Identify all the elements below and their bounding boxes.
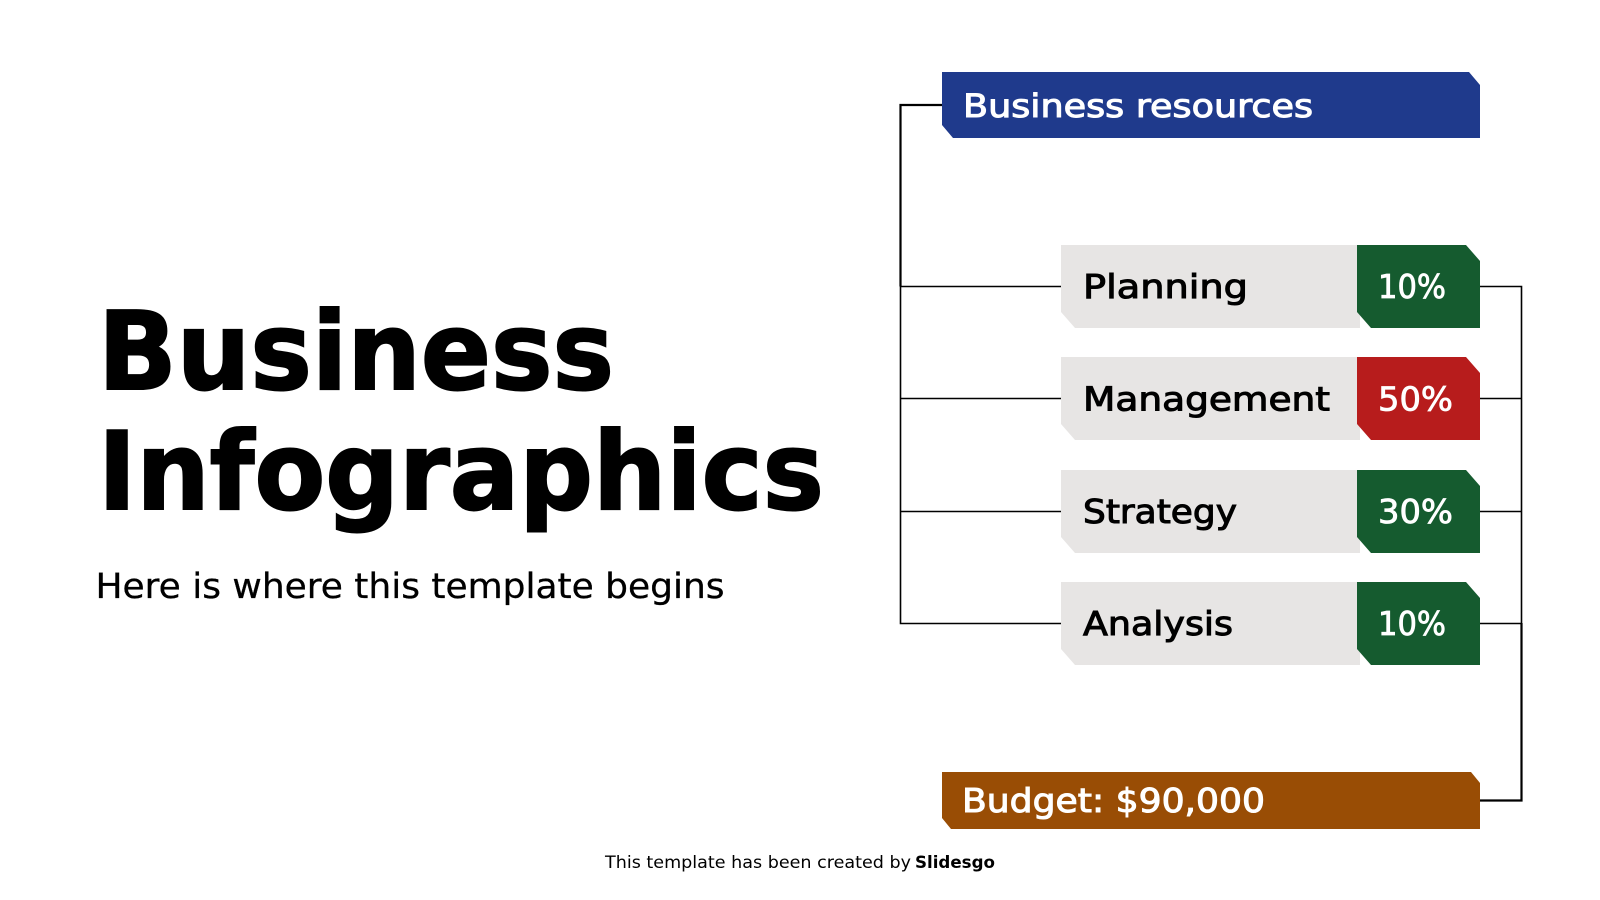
row: planning 10%: Planning [1083, 267, 1248, 306]
row: strategy 30% [1061, 470, 1480, 553]
footer bar: budget [942, 772, 1480, 829]
row: strategy 30%: 30% [1378, 492, 1453, 531]
header bar: business resources: Business resources [963, 87, 1313, 125]
row: analysis 10%: Analysis [1083, 604, 1233, 643]
title: Infographics [98, 410, 824, 535]
credit line: This template has been created by [604, 853, 911, 873]
footer bar: budget: Budget: $90,000 [962, 781, 1265, 820]
row: planning 10% [1061, 245, 1480, 328]
row: management 50%: 50% [1378, 380, 1453, 418]
row: management 50% [1061, 357, 1480, 440]
header bar: business resources [942, 72, 1480, 138]
subtitle: Here is where this template begins [96, 567, 725, 607]
left connector bracket [900, 105, 1061, 624]
title [98, 290, 824, 535]
row: management 50%: Management [1083, 380, 1330, 418]
right connector bracket [1480, 286, 1522, 800]
credit line: Slidesgo [915, 853, 995, 873]
row: analysis 10% [1061, 582, 1480, 665]
row: analysis 10%: 10% [1378, 604, 1446, 643]
title: Business [98, 290, 614, 415]
row: strategy 30%: Strategy [1083, 492, 1237, 531]
row: planning 10%: 10% [1378, 267, 1446, 306]
